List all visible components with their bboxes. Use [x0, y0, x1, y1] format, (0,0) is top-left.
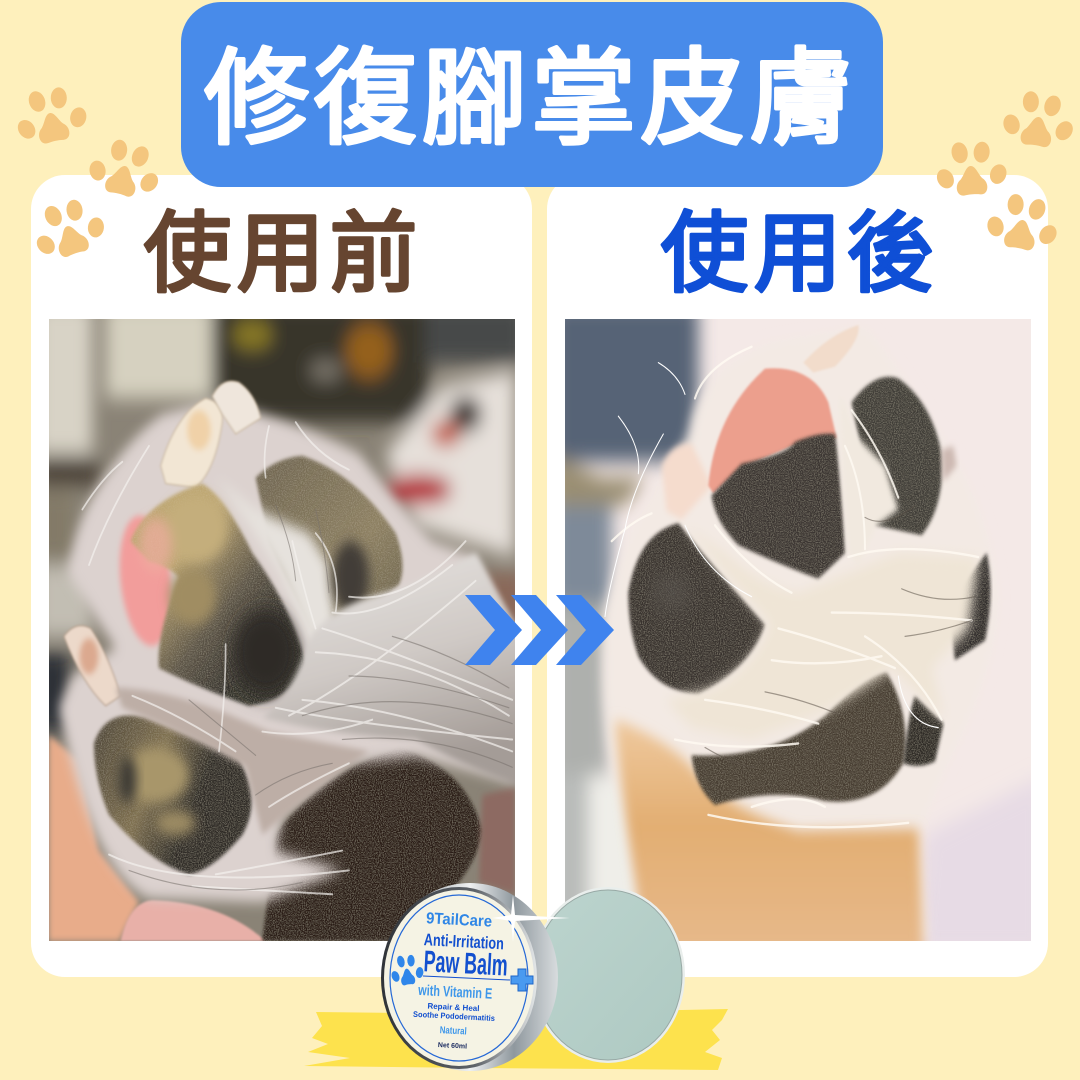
- centre cream fur: [665, 525, 978, 740]
- tan leg fur: [615, 720, 923, 954]
- title banner: [181, 2, 883, 187]
- pad bottom: [692, 672, 905, 805]
- vitamin label: with Vitamin E: [417, 982, 493, 1003]
- pad 1 crusted: [131, 484, 306, 706]
- heading: after: 使用後: [660, 183, 940, 310]
- pad top: [712, 434, 845, 579]
- panel: after: [547, 175, 1048, 977]
- left middle fur: [116, 688, 369, 835]
- hand skin: [49, 736, 139, 941]
- claims: Repair & Heal: [427, 1001, 480, 1013]
- fur halo: [596, 386, 710, 766]
- white fur between toes: [840, 422, 902, 550]
- yellow brush stroke: [304, 1009, 728, 1070]
- pad left: [628, 523, 765, 694]
- photo: healed paw after treatment: [552, 303, 1045, 954]
- title text: 修復腳掌皮膚: [204, 14, 858, 166]
- tin label text: Natural: [439, 1025, 467, 1038]
- pad small: [903, 696, 943, 766]
- thumb: [121, 900, 266, 941]
- right sweep fur: [262, 553, 522, 787]
- tin label text: Net 60ml: [438, 1042, 467, 1051]
- white fur over pad 2: [234, 498, 340, 644]
- pad 2 crusted: [256, 456, 402, 636]
- panel: before: [31, 175, 532, 977]
- tin label text: [411, 910, 510, 1052]
- nail 2: [212, 381, 261, 434]
- photo: cracked paw before treatment: [36, 303, 526, 941]
- pink pad top: [708, 368, 837, 494]
- product: paw balm tin: [381, 883, 570, 1071]
- fur halo: [59, 398, 515, 902]
- pink skin patch: [117, 513, 172, 648]
- product name: Anti-Irritation: [423, 930, 504, 953]
- sparkle: [492, 895, 570, 942]
- paw icon on label: [387, 952, 426, 987]
- fur strands: [82, 422, 512, 894]
- tin label text: Soothe Pododermatitis: [413, 1010, 496, 1023]
- fur strands: [605, 347, 978, 827]
- arrows: before to after chevrons: [465, 595, 614, 665]
- product: open balm tin lid: [531, 887, 685, 1063]
- icons: decorative paw prints: [8, 80, 1080, 266]
- rule under name: [423, 976, 510, 980]
- pad top right: [852, 377, 942, 535]
- lower dark pad: [262, 747, 482, 941]
- heading: before: 使用前: [143, 183, 423, 310]
- nail 3: [64, 626, 121, 706]
- pad right: [948, 553, 990, 660]
- pad 3 crusted: [94, 716, 252, 874]
- tin label text: Paw Balm: [423, 945, 509, 983]
- brand name: 9TailCare: [426, 910, 492, 931]
- nail: [803, 325, 859, 373]
- plus icon: [511, 969, 533, 991]
- side nail: [662, 444, 712, 519]
- nail 1: [161, 398, 222, 488]
